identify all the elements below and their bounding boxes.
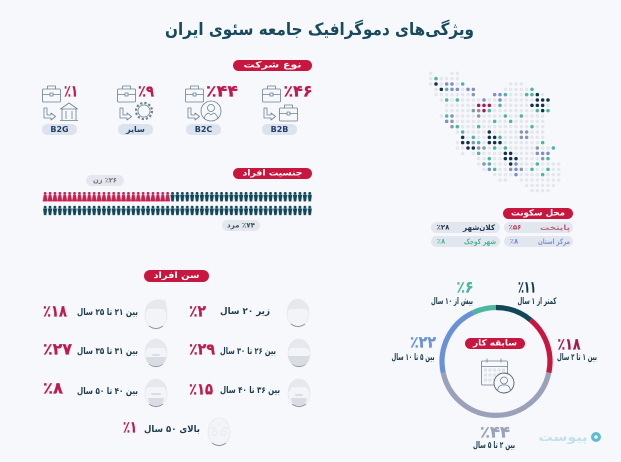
card: B2B: B2B: [271, 125, 288, 134]
stat: over 10 years: [431, 278, 474, 307]
heading: residence: محل سکونت: [511, 208, 565, 218]
donut chart: [442, 308, 550, 415]
row: 31 to 35: ٪۲۷: [43, 340, 72, 358]
row: 21 to 25: [43, 299, 167, 329]
row: 40 to 50: [43, 378, 167, 407]
row: 21 to 25: بین ۲۱ تا ۲۵ سال: [77, 308, 138, 318]
title: ویژگی‌های دموگرافیک جامعه سئوی ایران: [165, 19, 474, 40]
item: small city: [431, 236, 500, 247]
panel: gender: [43, 168, 312, 231]
item: capital: ٪۵۶: [509, 224, 521, 232]
stat: 1 to 2 years: [557, 334, 597, 363]
heading: gender: [233, 168, 312, 179]
heading: experience: [465, 338, 525, 349]
card: other: سایر: [125, 125, 145, 134]
card: B2G: B2G: [50, 125, 69, 134]
row: 26 to 30: [189, 339, 310, 367]
logo: [538, 430, 601, 445]
card: B2B: [262, 82, 312, 135]
stat: under 1 year: کمتر از ۱ سال: [518, 297, 557, 307]
item: small city: شهر کوچک: [464, 237, 496, 246]
row: over 50: بالای ۵۰ سال: [144, 425, 200, 435]
row: 21 to 25: ٪۱۸: [43, 302, 67, 320]
item: capital: [504, 222, 573, 233]
heading: age: سن افراد: [154, 271, 200, 281]
item: metropolis: ٪۲۸: [437, 224, 450, 232]
row: 36 to 40: ٪۱۵: [189, 380, 213, 398]
stat: under 1 year: ٪۱۱: [518, 278, 536, 296]
row: 26 to 30: بین ۲۶ تا ۳۰ سال: [220, 347, 276, 357]
row: over 50: ٪۱: [123, 418, 137, 436]
icon: calendar with person: [482, 358, 514, 393]
card: other: [118, 82, 154, 135]
card: other: ٪۹: [138, 82, 154, 100]
panel: company type: [42, 60, 312, 135]
row: under 20: ٪۲: [189, 302, 206, 320]
row: 31 to 35: [43, 339, 167, 367]
row: 36 to 40: [189, 379, 310, 407]
label: women: [86, 175, 124, 186]
item: province center: مرکز استان: [538, 237, 570, 246]
label: women: ٪۲۶ زن: [93, 176, 117, 184]
heading: residence: [503, 208, 573, 219]
panel: residence: [431, 208, 573, 247]
heading: company type: [233, 60, 312, 71]
heading: gender: جنسیت افراد: [242, 168, 302, 178]
row: 36 to 40: بین ۳۶ تا ۴۰ سال: [220, 386, 280, 396]
stat: 5 to 10 years: [392, 332, 436, 363]
label: men: [222, 220, 260, 231]
stat: 1 to 2 years: بین ۱ تا ۲ سال: [557, 353, 597, 363]
heading: age: [144, 270, 209, 282]
card: B2C: ٪۴۴: [206, 82, 238, 100]
card: B2B: ٪۴۶: [284, 82, 312, 100]
item: small city: ٪۸: [437, 238, 446, 246]
map: dotted Iran: [431, 73, 564, 191]
row: 40 to 50: ٪۸: [43, 378, 63, 398]
row: under 20: زیر ۲۰ سال: [220, 307, 270, 317]
stat: 5 to 10 years: ٪۲۲: [410, 332, 436, 352]
stat: 2 to 5 years: [473, 422, 515, 451]
item: province center: [504, 236, 573, 247]
item: metropolis: کلان‌شهر: [462, 223, 496, 232]
row: over 50: [123, 418, 230, 446]
stat: 2 to 5 years: ٪۴۴: [480, 422, 510, 442]
logo: پیوست: [538, 430, 588, 445]
row: under 20: [189, 299, 309, 327]
stat: over 10 years: بیش از ۱۰ سال: [431, 297, 473, 307]
pictogram chart: gender ratio: [43, 192, 312, 215]
stat: 5 to 10 years: بین ۵ تا ۱۰ سال: [392, 353, 434, 363]
item: metropolis: [431, 222, 500, 233]
label: men: ٪۷۴ مرد: [227, 222, 256, 230]
heading: experience: سابقه کار: [472, 338, 517, 348]
card: B2G: [42, 82, 78, 135]
row: 31 to 35: بین ۳۱ تا ۳۵ سال: [77, 347, 138, 357]
row: 26 to 30: ٪۲۹: [189, 340, 215, 358]
stat: over 10 years: ٪۶: [456, 278, 474, 296]
stat: 1 to 2 years: ٪۱۸: [558, 334, 581, 354]
item: capital: پایتخت: [540, 223, 570, 232]
item: province center: ٪۸: [510, 238, 519, 246]
panel: age: [43, 270, 310, 446]
card: B2C: [186, 82, 238, 135]
heading: company type: نوع شرکت: [244, 60, 302, 70]
stat: 2 to 5 years: بین ۲ تا ۵ سال: [473, 441, 515, 451]
row: 40 to 50: بین ۴۰ تا ۵۰ سال: [77, 387, 138, 397]
stat: under 1 year: [518, 278, 557, 307]
panel: work experience: [392, 278, 597, 451]
card: B2C: B2C: [195, 125, 212, 134]
card: B2G: ٪۱: [64, 82, 78, 100]
